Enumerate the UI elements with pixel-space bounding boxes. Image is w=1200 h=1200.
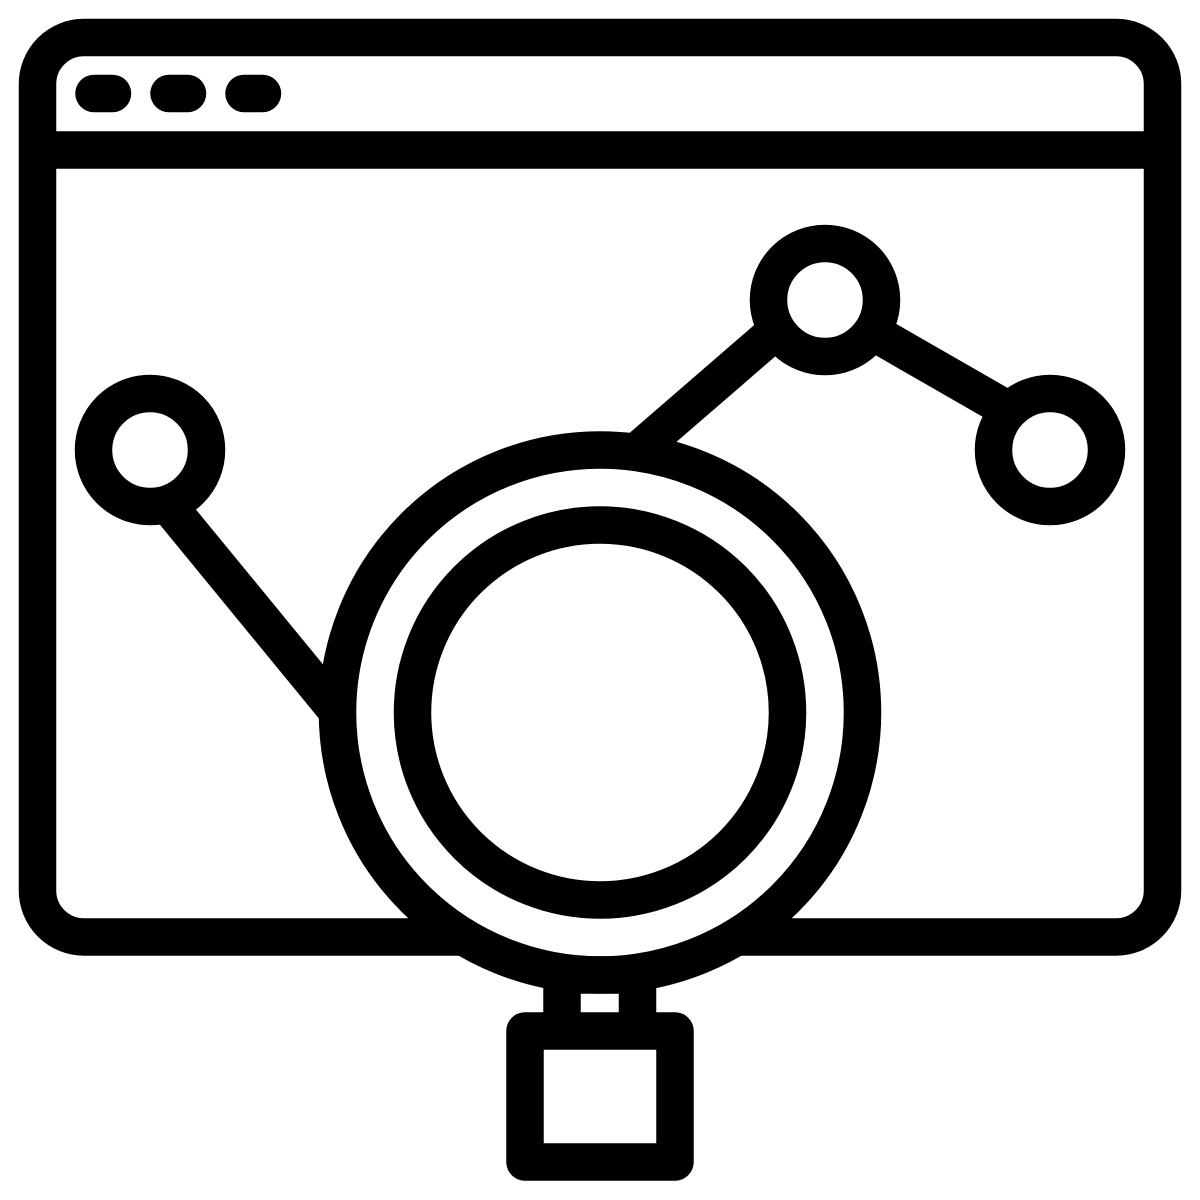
chart data point: left [94,394,206,506]
browser window frame [38,38,1162,937]
chart line segments [170,334,1003,711]
magnifying glass handle [525,1031,675,1162]
chart data point: top [768,244,882,356]
chart data point: right [994,394,1106,506]
magnifying glass neck [562,975,638,1031]
title bar divider [38,131,1162,169]
magnifying glass inner lens [412,525,788,900]
window control buttons [94,75,262,112]
magnifying glass outer ring [338,450,862,975]
